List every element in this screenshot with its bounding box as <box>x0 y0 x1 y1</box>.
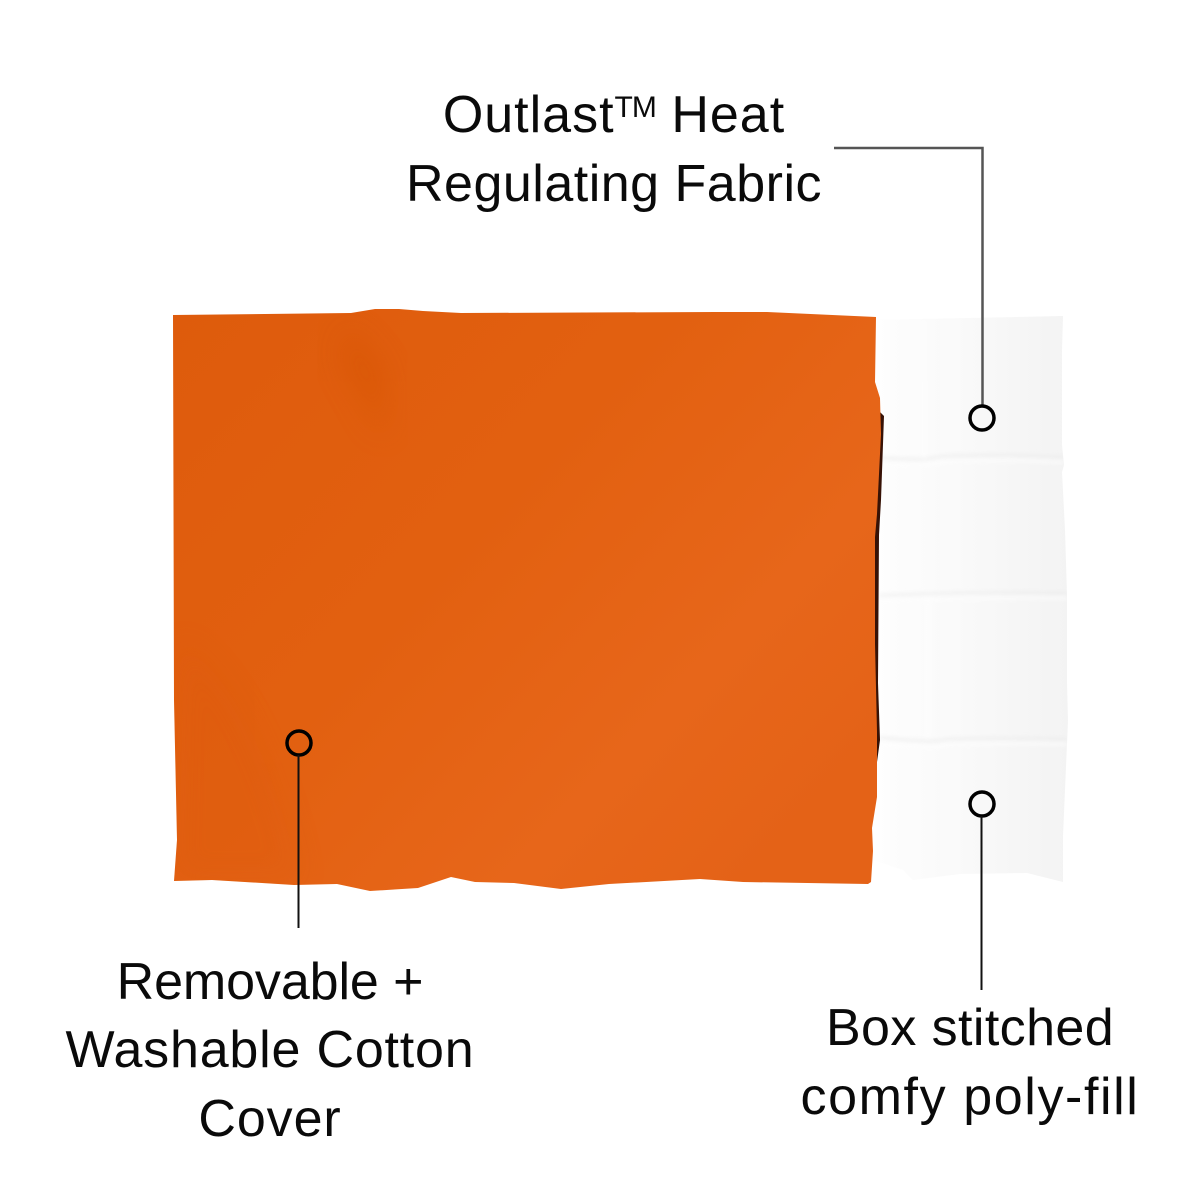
callout line: Outlast <box>834 148 994 430</box>
callout line: cover <box>287 731 311 928</box>
orange cotton cover <box>173 309 881 891</box>
label: Outlast fabric: OutlastTM Heat <box>443 86 785 144</box>
label: poly-fill <box>801 999 1139 1126</box>
label: cotton cover <box>66 952 474 1148</box>
label: poly-fill: Box stitched <box>826 999 1114 1057</box>
label: Outlast fabric <box>406 86 822 212</box>
duvet illustration <box>173 146 1068 990</box>
label: cotton cover: Removable + <box>117 952 423 1010</box>
white poly-fill insert <box>870 316 1068 882</box>
label: cotton cover: Washable Cotton <box>66 1021 474 1079</box>
callout line: poly-fill <box>970 792 994 990</box>
label: Outlast fabric: Regulating Fabric <box>406 154 822 212</box>
label: poly-fill: comfy poly-fill <box>801 1068 1139 1126</box>
zipper edge <box>873 412 884 762</box>
label: cotton cover: Cover <box>198 1090 342 1148</box>
